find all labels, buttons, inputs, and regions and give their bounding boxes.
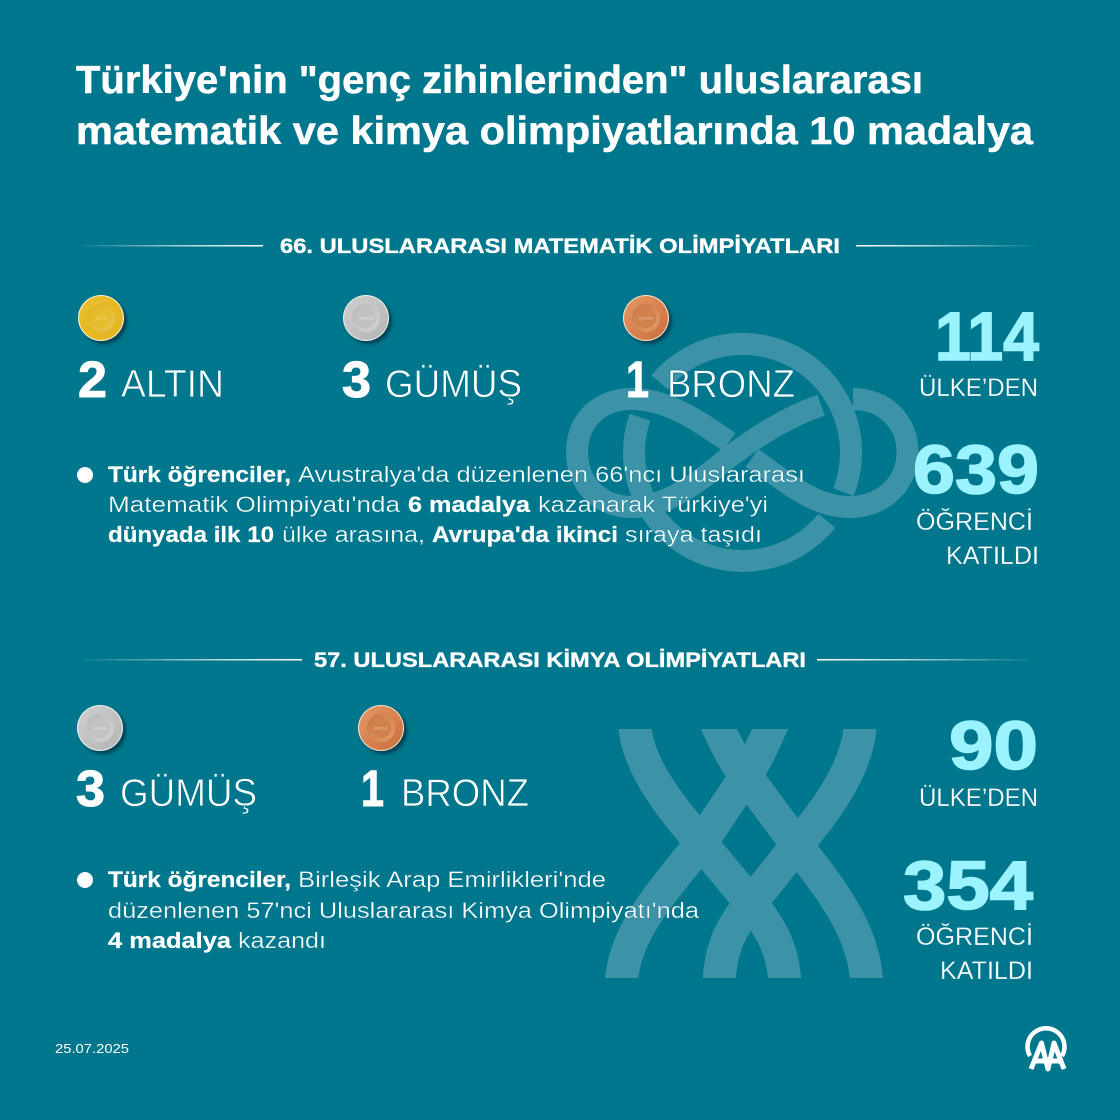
medal: gold [78,295,127,344]
stat: 354 students: 354 [903,847,1033,924]
text block: mathematics summary: dünyada ilk 10 [108,522,274,547]
text block: mathematics summary: Türk öğrenciler, [108,462,291,487]
medal: silver chemistry: GÜMÜŞ [93,726,108,730]
stat: 90 countries: ÜLKE’DEN [919,784,1038,812]
medal: bronze: BRONZ [639,316,654,320]
medal count: 2 gold: ALTIN [121,363,224,406]
text block: chemistry summary: kazandı [238,928,326,953]
title: Türkiye'nin "genç zihinlerinden" uluslararası [76,59,923,102]
stat: 114 countries [919,298,1039,402]
stat: 354 students: ÖĞRENCİ [916,922,1033,951]
medal: bronze chemistry [358,705,407,754]
medal count: 1 bronze [626,351,795,408]
section heading: mathematics: 66. ULUSLARARASI MATEMATİK OLİMPİYATLARI [280,234,840,258]
logo: AA [1028,1028,1064,1069]
text block: mathematics summary: 6 madalya [408,492,531,517]
medal count: 2 gold: 2 [78,351,107,408]
text block: chemistry summary: 4 madalya [108,928,232,953]
text block: mathematics summary [77,462,805,547]
text block: chemistry summary: düzenlenen 57'nci Uluslararası Kimya Olimpiyatı'nda [108,898,700,923]
stat: 114 countries: ÜLKE’DEN [919,374,1038,402]
text block: mathematics summary: sıraya taşıdı [625,522,762,547]
medal count: 1 bronze chemistry: 1 [361,760,384,817]
medal count: 2 gold [78,351,224,408]
text block: mathematics summary: Matematik Olimpiyatı'nda [108,492,401,517]
medal: silver [343,295,392,344]
text block: mathematics summary: kazanarak Türkiye'yi [538,492,768,517]
text block: mathematics summary: Avustralya'da düzenlenen 66'ncı Uluslararası [298,462,805,487]
medal: bronze chemistry: BRONZ [374,726,389,730]
text block: chemistry summary: Türk öğrenciler, [108,867,291,892]
stat: 114 countries: 114 [935,298,1039,375]
medal: bronze [623,295,672,344]
text block: chemistry summary: Birleşik Arap Emirlikleri'nde [298,867,606,892]
stat: 639 students: ÖĞRENCİ [916,507,1033,536]
title: matematik ve kimya olimpiyatlarında 10 madalya [76,110,1033,153]
knot emblem watermark [577,344,908,561]
stat: 90 countries [919,707,1038,812]
stat: 639 students [913,431,1039,570]
stat: 354 students [903,847,1033,985]
medal count: 3 silver chemistry [76,760,257,817]
section heading: chemistry: 57. ULUSLARARASI KİMYA OLİMPİYATLARI [314,648,806,672]
medal count: 1 bronze: BRONZ [667,363,795,406]
medal count: 3 silver: 3 [342,351,371,408]
medal count: 1 bronze chemistry [361,760,529,817]
medal: gold: ALTIN [95,316,107,320]
medal count: 3 silver chemistry: 3 [76,760,105,817]
medal count: 3 silver chemistry: GÜMÜŞ [120,772,257,815]
medal count: 1 bronze: 1 [626,351,649,408]
stat: 354 students: KATILDI [940,957,1033,985]
DNA helix watermark [621,715,867,990]
stat: 90 countries: 90 [949,707,1038,784]
date: 25.07.2025 [55,1041,129,1056]
stat: 639 students: 639 [913,431,1039,508]
title [76,59,1033,153]
medal: silver: GÜMÜŞ [359,316,374,320]
medal: silver chemistry [77,705,126,754]
medal count: 1 bronze chemistry: BRONZ [401,772,529,815]
stat: 639 students: KATILDI [946,542,1039,570]
text block: mathematics summary: ülke arasına, [282,522,425,547]
text block: mathematics summary: Avrupa'da ikinci [432,522,618,547]
medal count: 3 silver: GÜMÜŞ [385,363,522,406]
text block: chemistry summary [77,867,700,953]
medal count: 3 silver [342,351,522,408]
